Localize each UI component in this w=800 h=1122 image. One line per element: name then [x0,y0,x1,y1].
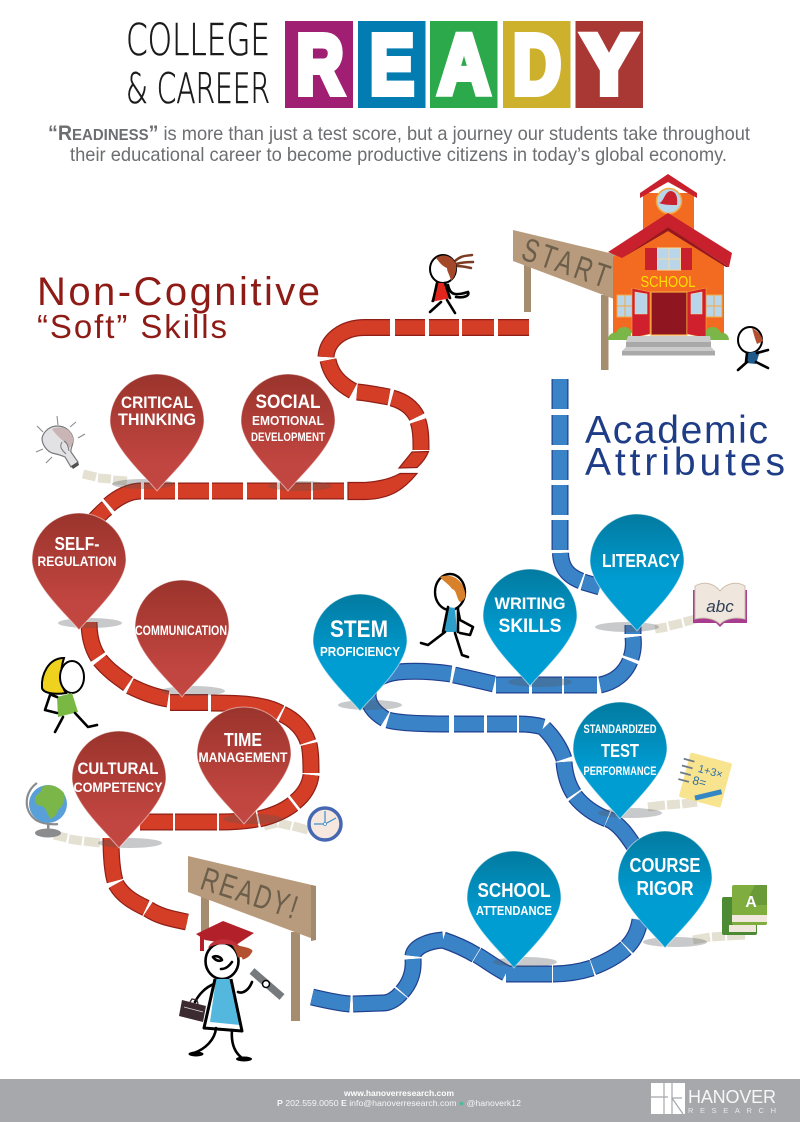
heading: Non-Cognitive Soft Skills [37,270,320,345]
footer contact text [277,1088,521,1108]
sign: ready: READY! [196,861,304,927]
pin: school attendance [467,851,561,968]
steps [626,336,711,342]
footer bar [0,1079,800,1122]
heading: Academic Attributes [585,409,785,484]
pin: standardized test performance: STANDARDIZED [584,724,656,736]
pin shadows [58,479,707,967]
character: boy with orange hair [421,574,473,657]
letter blocks: READY: E [370,18,414,112]
pin: self-regulation: SELF- [54,534,100,554]
character: girl with red dress [430,255,473,313]
icon: math notepad: 1+3× [697,763,724,781]
pin: standardized test performance: TEST [601,741,639,761]
sign: ready [188,856,316,1021]
pin: writing skills: SKILLS [498,616,562,637]
decorative side paths to icons [54,474,745,940]
pin: writing skills [483,569,577,686]
heading: Non-Cognitive Soft Skills: “Soft” Skills [37,308,227,345]
pin: school attendance: ATTENDANCE [476,903,552,918]
doors [651,292,687,335]
Hanover Research logo [651,1083,776,1115]
pin: writing skills: WRITING [494,594,566,613]
Hanover Research logo: HANOVER [688,1087,776,1107]
pin: critical thinking [110,374,204,491]
icon: green books [722,885,767,935]
footer contact text: www.hanoverresearch.com [343,1088,454,1098]
letter blocks: READY: Y [582,18,636,112]
pin: social emotional development [241,374,335,491]
letter blocks: READY [285,18,643,112]
school sign: SCHOOL [640,274,696,291]
tower [643,193,694,233]
heading: Academic Attributes: Attributes [585,441,785,484]
limbs [194,982,252,1058]
pin: standardized test performance: PERFORMANCE [584,766,657,778]
icon: globe [27,783,67,838]
letter blocks: READY: A [438,18,490,112]
pin: time management [197,707,291,824]
pin: communication: COMMUNICATION [135,623,227,638]
pin: course rigor: RIGOR [636,878,694,900]
icon: math notepad [674,751,732,808]
main body [613,225,724,333]
pin: critical thinking: THINKING [118,410,196,429]
pin: course rigor [618,831,712,948]
character: running boy near school [738,327,768,370]
red road: soft skills path [89,328,529,922]
pin: critical thinking: CRITICAL [121,393,193,412]
diploma [252,971,282,997]
Hanover Research logo: RESEARCH [688,1106,776,1115]
pin: literacy [590,514,684,631]
title words: College & Career: & CAREER [126,64,270,113]
intro text [48,122,751,166]
pin: school attendance: SCHOOL [478,880,550,902]
icon: math notepad: 8= [691,773,708,790]
title: College & Career Ready [126,15,643,113]
title words: College & Career: COLLEGE [126,15,270,66]
side windows [617,295,633,317]
pin: stem proficiency: STEM [330,616,388,643]
icon: open book: abc [706,597,734,616]
head [206,943,238,979]
character: girl with yellow hair [42,658,97,732]
pin: cultural competency: COMPETENCY [74,779,163,795]
pin: social emotional development: SOCIAL [256,392,321,413]
pin: self-regulation: REGULATION [38,553,116,569]
pin: time management: MANAGEMENT [198,750,288,765]
pin: cultural competency: CULTURAL [78,759,158,778]
pin: self-regulation [32,513,126,630]
briefcase [179,1000,206,1022]
intro text: their educational career to become productive citizens in today’s global economy. [70,144,727,166]
blue road: academic path [312,379,640,1004]
character: graduate with diploma and briefcase [179,921,282,1062]
bushes [608,327,631,340]
pin: communication [135,580,229,697]
title words: College & Career [126,15,270,113]
pin: social emotional development: EMOTIONAL [252,413,324,428]
start sign: START [517,232,618,297]
letter blocks: READY: D [513,18,561,112]
pin: literacy: LITERACY [602,551,680,571]
pin: stem proficiency [313,594,407,711]
letter blocks: READY: R [296,18,344,112]
icon: green books: A [745,894,757,911]
start sign [513,230,622,370]
pin: course rigor: COURSE [630,855,700,877]
pin: standardized test performance [573,702,667,819]
icon: open book [693,583,747,627]
pin: social emotional development: DEVELOPMENT [251,432,325,444]
heading: Academic Attributes: Academic [585,409,768,452]
pin: cultural competency [72,731,166,848]
icon: school building [608,174,732,356]
pin: time management: TIME [224,730,262,750]
cap [196,921,254,945]
icon: clock [309,808,341,840]
footer contact text: P 202.559.0050 E info@hanoverresearch.com ● @hanoverk12 [277,1098,521,1108]
icon: light bulb [36,416,85,469]
gown [210,979,240,1025]
upper window [645,248,657,270]
pin: stem proficiency: PROFICIENCY [320,644,400,659]
intro text: “READINESS” is more than just a test score, but a journey our students take throughout [48,122,751,145]
heading: Non-Cognitive Soft Skills: Non-Cognitive [37,270,320,314]
